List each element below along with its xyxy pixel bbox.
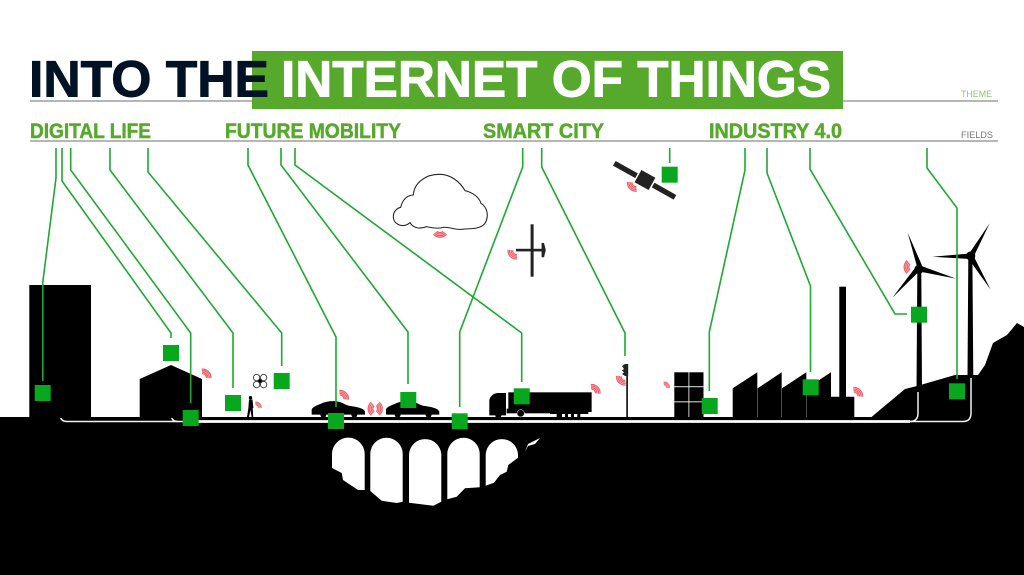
title highlight box xyxy=(252,51,843,109)
field headings xyxy=(30,120,842,143)
heading: smart city: SMART CITY xyxy=(483,120,604,143)
connector above house xyxy=(62,148,179,361)
factory xyxy=(733,287,854,418)
header rules xyxy=(30,101,998,141)
connector to truck xyxy=(295,148,530,404)
wind turbine right xyxy=(932,223,991,378)
ground and hillside xyxy=(0,323,1024,575)
connector to solar stack xyxy=(702,148,745,414)
title: into the: INTO THE xyxy=(29,50,269,108)
person xyxy=(247,396,253,417)
cloud xyxy=(393,174,487,229)
connector to tall building xyxy=(35,148,56,401)
title: internet of things: INTERNET OF THINGS xyxy=(281,50,831,108)
drone xyxy=(253,374,267,388)
house xyxy=(140,365,202,418)
solar panel stack xyxy=(674,372,704,417)
connector to viaduct xyxy=(452,148,523,429)
connector to satellite xyxy=(662,148,678,183)
heading: future mobility: FUTURE MOBILITY xyxy=(225,120,401,143)
theme label: THEME xyxy=(961,89,992,100)
connectors: industry 4.0 xyxy=(702,148,965,414)
satellite xyxy=(614,163,675,197)
truck xyxy=(489,392,592,418)
connector to right car xyxy=(281,148,416,408)
title xyxy=(29,50,831,108)
car left xyxy=(312,401,365,418)
connector to drone xyxy=(148,148,290,389)
connectors: smart city xyxy=(452,148,678,429)
connector to left turbine xyxy=(810,148,927,323)
connectors: digital life xyxy=(35,148,290,426)
plane xyxy=(516,224,546,277)
wireless signals xyxy=(200,180,910,415)
car right xyxy=(386,401,439,418)
tall building xyxy=(29,285,91,418)
connector to house xyxy=(71,148,199,426)
heading: industry 4.0: INDUSTRY 4.0 xyxy=(709,120,842,143)
connector to traffic light xyxy=(542,148,625,356)
connector to left car xyxy=(248,148,344,429)
traffic light xyxy=(622,364,628,417)
wind turbine left xyxy=(892,233,956,392)
connector to factory xyxy=(767,148,819,395)
viaduct arches xyxy=(332,438,540,506)
road and cable lines xyxy=(60,378,971,422)
connectors: future mobility xyxy=(248,148,530,429)
fields label: FIELDS xyxy=(961,130,993,141)
connector to right turbine xyxy=(927,148,965,399)
heading: digital life: DIGITAL LIFE xyxy=(30,120,151,143)
connector to person xyxy=(110,148,241,411)
